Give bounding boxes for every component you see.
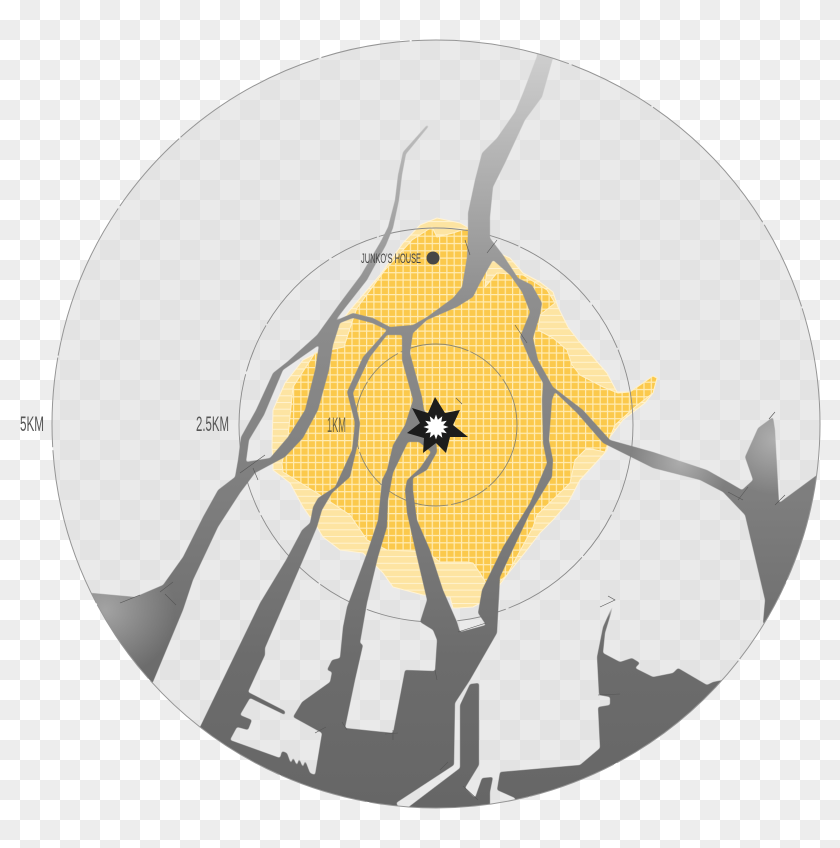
sketch ticks at water corners xyxy=(120,240,785,800)
rivers and sea xyxy=(92,54,816,808)
label: 5 km: 5KM xyxy=(20,413,44,436)
ring: 2.5 km radius xyxy=(239,228,633,622)
ring: 1 km radius xyxy=(355,344,517,506)
damage zone: outer pale area xyxy=(272,218,657,608)
icon: hypocentre explosion xyxy=(407,397,468,453)
infographic: blast radius map: 1KM xyxy=(327,414,346,437)
label: 2.5 km: 2.5KM xyxy=(196,413,229,436)
icon: Junko's house marker xyxy=(426,252,440,264)
label: Junko's house: JUNKO'S HOUSE xyxy=(361,250,421,266)
damage zone: inner yellow grid area xyxy=(282,227,657,590)
